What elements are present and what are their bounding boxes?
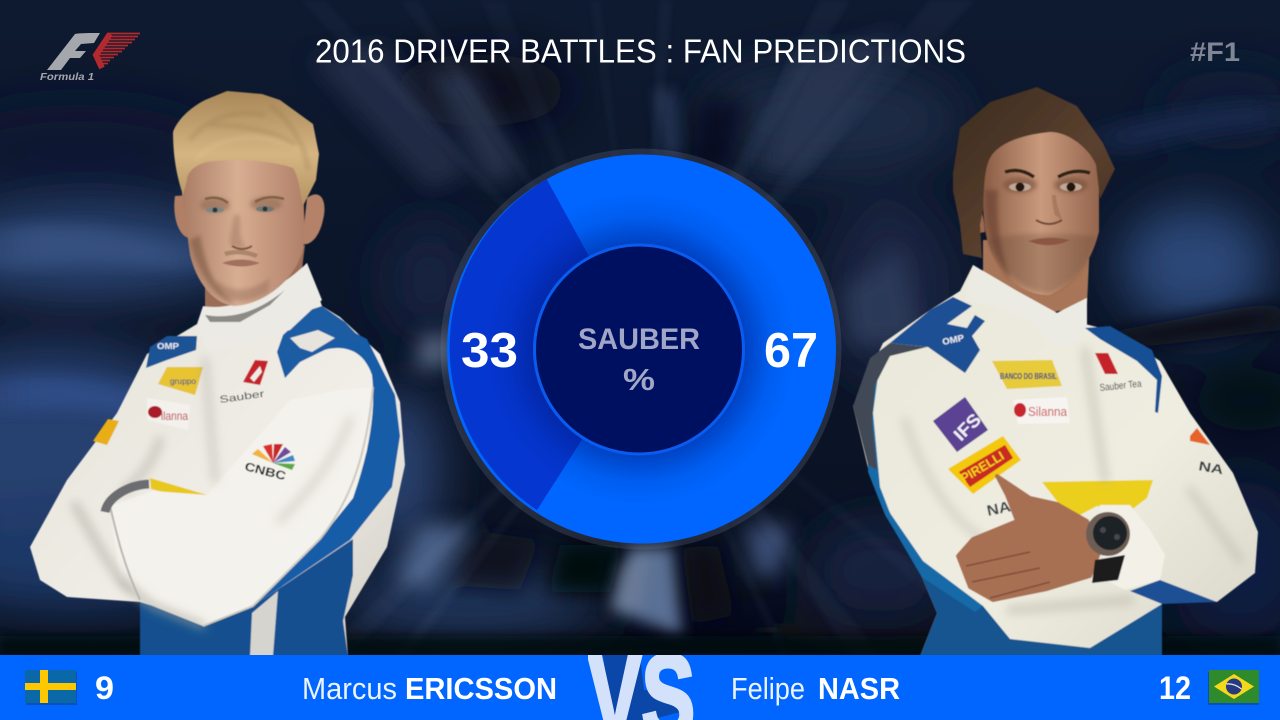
value: 67: 67	[764, 324, 818, 378]
shoulder panel left with logo: OMP	[157, 342, 180, 351]
blue lower suit	[140, 539, 353, 656]
collar	[965, 265, 1087, 348]
first name: Felipe: Felipe	[731, 671, 805, 706]
yellow waist band	[1042, 480, 1153, 515]
driver portrait: Felipe Nasr	[853, 87, 1258, 656]
Formula 1 logo	[40, 33, 140, 83]
left shoulder panel with logo: OMP	[941, 333, 965, 347]
value: 33: 33	[461, 324, 518, 378]
IFS purple patch	[933, 397, 988, 452]
right shoulder panel	[1085, 326, 1162, 413]
IFS purple patch: IFS	[950, 409, 985, 445]
blue sleeve stripe	[866, 366, 983, 612]
collar	[197, 263, 322, 352]
wrist watch	[105, 484, 149, 512]
yellow waist band	[150, 478, 207, 510]
logo: red 1	[94, 34, 140, 68]
VS emblem shadow	[603, 655, 684, 720]
Silanna patch: Silanna	[1028, 404, 1068, 419]
shoulder panel right	[277, 306, 367, 378]
segment: Nasr 67	[447, 154, 836, 544]
white leg stripe	[250, 591, 278, 656]
label: SAUBER: SAUBER	[578, 323, 700, 356]
CNBC logo	[243, 444, 295, 483]
hair strands	[190, 105, 308, 170]
flag: Sweden	[25, 670, 77, 705]
Pirelli patch: PIRELLI	[958, 448, 1007, 486]
outer halo ring	[444, 152, 838, 546]
flag: Brazil	[1208, 670, 1259, 705]
blue lower suit	[900, 540, 1162, 656]
front forearm	[110, 387, 373, 626]
cuff and sleeve	[1100, 505, 1165, 590]
segment: Ericsson 33	[450, 179, 640, 510]
Sauber badge	[1095, 353, 1142, 394]
eyes and brows	[1005, 170, 1090, 192]
hashtag: #F1	[1190, 37, 1240, 67]
donut chart: Sauber %	[444, 152, 838, 546]
blue side stripe	[253, 325, 400, 606]
race suit body	[30, 263, 405, 656]
Sauber badge: Sauber	[219, 389, 266, 406]
sponsor mark on sleeve: NA	[985, 498, 1012, 520]
driver portrait: Marcus Ericsson	[30, 91, 405, 656]
Banco do Brasil patch: BANCO DO BRASIL	[1000, 371, 1057, 381]
yellow sponsor patch: gruppo	[170, 377, 197, 386]
title: 2016 DRIVER BATTLES : FAN PREDICTIONS	[315, 32, 966, 70]
surname: NASR: NASR	[818, 671, 900, 706]
ear	[962, 193, 985, 234]
Silanna patch	[147, 398, 190, 430]
hair	[953, 87, 1115, 258]
CNBC and sponsor on right sleeve	[1190, 428, 1225, 477]
number: Nasr: 12	[1159, 670, 1191, 706]
ear and neck	[174, 194, 325, 315]
suit shading	[75, 360, 350, 626]
inner shadow	[447, 154, 836, 544]
race suit body	[853, 265, 1258, 656]
logo: grey F	[47, 33, 100, 70]
suit shading	[905, 350, 1240, 610]
surname: ERICSSON: ERICSSON	[405, 671, 557, 706]
label: percent: %	[623, 362, 655, 397]
neck	[983, 240, 1090, 315]
face shading	[190, 197, 282, 304]
Pirelli patch	[948, 436, 1021, 494]
nose and mouth	[1028, 195, 1070, 245]
Sauber badge: Sauber Tea	[1099, 379, 1142, 394]
wrist watch	[1086, 512, 1130, 583]
eyes and brows	[205, 197, 284, 213]
centre disc	[534, 245, 744, 454]
hand	[958, 476, 1100, 600]
yellow sponsor patch	[158, 367, 203, 395]
Silanna patch	[1013, 397, 1070, 424]
first name: Marcus: Marcus	[302, 671, 397, 706]
face	[983, 122, 1099, 295]
Silanna patch: ilanna	[161, 409, 188, 423]
CNBC and sponsor on right sleeve: NA	[1197, 458, 1225, 477]
left shoulder panel with logo	[890, 297, 985, 373]
Banco do Brasil patch	[992, 360, 1062, 389]
Pirelli sleeve patch	[93, 419, 119, 445]
Sauber badge	[219, 360, 268, 406]
stubble and shading	[985, 177, 1096, 293]
bottom bar	[0, 655, 1280, 720]
number: Ericsson: 9	[95, 670, 114, 706]
shoulder panel left with logo	[146, 336, 197, 368]
grey shoulder stripe	[853, 343, 927, 470]
face	[182, 145, 305, 306]
CNBC logo: CNBC	[243, 459, 288, 483]
hair	[173, 91, 319, 206]
logo: wordmark: Formula 1	[40, 72, 94, 83]
nose and mouth	[222, 246, 260, 266]
